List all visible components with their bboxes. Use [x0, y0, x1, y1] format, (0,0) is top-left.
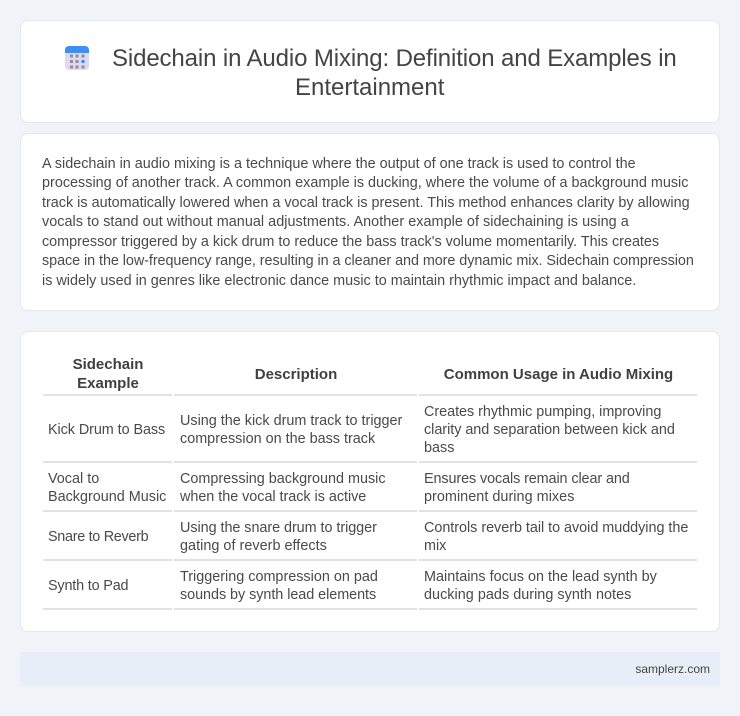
row: vocal to background music: prominent during mixes: [424, 489, 574, 505]
text block: compressor triggered by a kick drum to reduce the bass track's volume momentarily. This creates: [42, 234, 659, 250]
panel: table: [20, 331, 720, 632]
row: kick drum to bass: Using the kick drum track to trigger: [180, 413, 402, 429]
row: kick drum to bass: bass: [424, 440, 454, 456]
row: synth to pad: Maintains focus on the lead synth by: [424, 569, 657, 585]
table header: Description: [255, 366, 337, 383]
table header: Example: [77, 375, 139, 392]
table header: [73, 356, 673, 392]
footer bar: [20, 652, 720, 686]
row: synth to pad: Synth to Pad: [48, 578, 128, 594]
row: snare to reverb: Snare to Reverb: [48, 529, 148, 545]
row: snare to reverb: Using the snare drum to trigger: [180, 520, 377, 536]
row: vocal to background music: when the vocal track is active: [180, 489, 366, 505]
table header: Sidechain: [73, 356, 143, 373]
row: vocal to background music: Ensures vocals remain clear and: [424, 471, 630, 487]
panel: intro text: [20, 133, 720, 311]
text block: track is automatically lowered when a vocal track is present. This method enhances clarity by allowing: [42, 195, 690, 211]
row: kick drum to bass: Creates rhythmic pumping, improving: [424, 404, 661, 420]
row: snare to reverb: Controls reverb tail to avoid muddying the: [424, 520, 688, 536]
row: vocal to background music: Background Music: [48, 489, 166, 505]
row: synth to pad: [48, 569, 657, 603]
row: kick drum to bass: compression on the bass track: [180, 431, 375, 447]
row: vocal to background music: Compressing background music: [180, 471, 386, 487]
title: Sidechain in Audio Mixing: Definition and Examples in: [112, 45, 677, 72]
title: [112, 45, 677, 101]
row: vocal to background music: [48, 471, 630, 505]
row: kick drum to bass: Kick Drum to Bass: [48, 422, 165, 438]
text block: space in the low-frequency range, resulting in a cleaner and more dynamic mix. Sidechain compression: [42, 253, 694, 269]
table header: Common Usage in Audio Mixing: [444, 366, 673, 383]
row: kick drum to bass: clarity and separation between kick and: [424, 422, 675, 438]
text block: [42, 156, 694, 289]
row: vocal to background music: Vocal to: [48, 471, 99, 487]
row: kick drum to bass: [48, 404, 675, 456]
row: snare to reverb: [48, 520, 688, 554]
icon: calendar: [65, 46, 89, 70]
row: snare to reverb: mix: [424, 538, 446, 554]
row: synth to pad: Triggering compression on pad: [180, 569, 378, 585]
row: synth to pad: ducking pads during synth notes: [424, 587, 631, 603]
text block: processing of another track. A common example is ducking, where the volume of a background music: [42, 175, 688, 191]
footer source text: samplerz.com: [635, 662, 710, 676]
text block: A sidechain in audio mixing is a technique where the output of one track is used to control the: [42, 156, 636, 172]
text block: vocals to stand out without manual adjustments. Another example of sidechaining is using a: [42, 214, 629, 230]
text block: is widely used in genres like electronic dance music to maintain rhythmic impact and balance.: [42, 273, 636, 289]
row: synth to pad: sounds by synth lead elements: [180, 587, 376, 603]
title: Entertainment: [295, 74, 444, 101]
header card: [20, 20, 720, 123]
row: snare to reverb: gating of reverb effects: [180, 538, 327, 554]
